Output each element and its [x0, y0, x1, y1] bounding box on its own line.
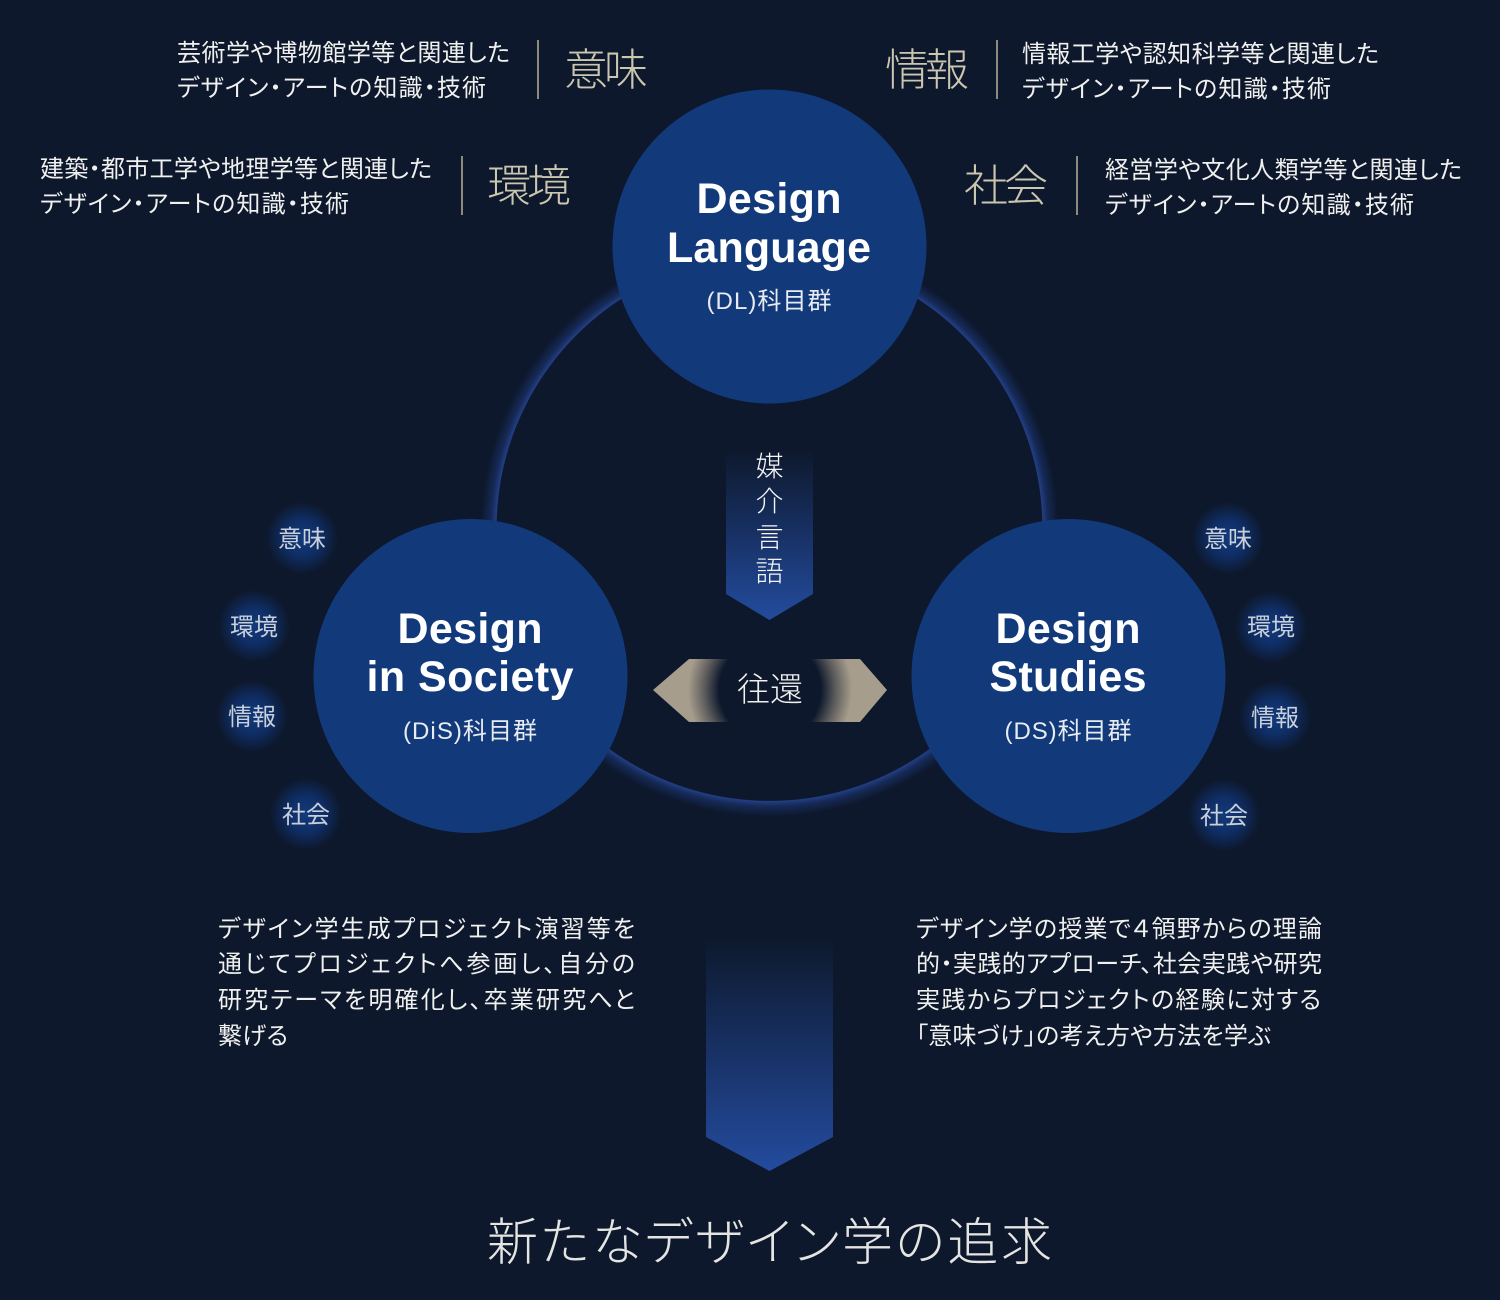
top-right block: 情報: 情報 — [885, 46, 969, 95]
circle: Design Studies — [912, 519, 1226, 833]
top-left block: 意味: デザイン・アートの知識・技術 — [177, 75, 486, 102]
top-left block: 環境: 環境 — [487, 162, 571, 211]
right satellite labels: 環境 — [1247, 614, 1295, 641]
top-right block: 社会: デザイン・アートの知識・技術 — [1105, 192, 1414, 219]
right satellite labels — [1188, 502, 1311, 851]
description: Design in Society: 通じてプロジェクトへ参画し、自分の — [218, 951, 635, 978]
circle: Design Language: Language — [667, 224, 871, 272]
description: Design in Society: デザイン学生成プロジェクト演習等を — [218, 916, 635, 943]
description: Design Studies: 「意味づけ」の考え方や方法を学ぶ — [916, 1023, 1271, 1050]
arrow: 媒介言語 — [726, 450, 813, 620]
description: Design Studies: デザイン学の授業で４領野からの理論 — [916, 916, 1322, 943]
top-left block: 環境 — [40, 156, 571, 218]
arrow: 媒介言語: 介 — [755, 486, 784, 517]
circle: Design Studies: Studies — [990, 653, 1146, 701]
description: Design in Society: 繋げる — [218, 1023, 288, 1050]
top-right block: 社会 — [964, 156, 1462, 219]
conclusion heading: 新たなデザイン学の追求 — [487, 1214, 1052, 1271]
left satellite labels: 社会 — [282, 802, 330, 829]
top-left block: 意味 — [177, 40, 648, 102]
left satellite labels: 意味 — [278, 526, 326, 553]
circle: Design in Society — [314, 519, 628, 833]
left satellite labels — [216, 502, 342, 850]
circle: Design Studies: Design — [996, 605, 1140, 653]
circle: Design in Society: in Society — [366, 653, 574, 701]
description: Design Studies: 的・実践的アプローチ、社会実践や研究 — [916, 951, 1322, 978]
top-left block: 環境: 建築・都市工学や地理学等と関連した — [40, 156, 432, 183]
top-right block: 情報 — [885, 40, 1379, 103]
top-right block: 情報: デザイン・アートの知識・技術 — [1022, 76, 1331, 103]
connecting ring — [480, 238, 1060, 818]
left satellite labels: 環境 — [230, 614, 278, 641]
double arrow: 往還: 往還 — [737, 671, 803, 708]
top-left block: 意味: 芸術学や博物館学等と関連した — [177, 40, 510, 67]
right satellite labels: 意味 — [1204, 526, 1252, 553]
arrow: 媒介言語: 語 — [755, 556, 784, 587]
description: Design Studies: 実践からプロジェクトの経験に対する — [916, 987, 1321, 1014]
arrow: 媒介言語: 言 — [755, 522, 784, 553]
left satellite labels: 情報 — [228, 704, 276, 731]
circle: Design Language: (DL)科目群 — [706, 288, 832, 315]
top-right block: 情報: 情報工学や認知科学等と関連した — [1022, 41, 1379, 68]
description: Design in Society: 研究テーマを明確化し、卒業研究へと — [218, 987, 635, 1014]
description: Design in Society — [218, 916, 635, 1050]
circle: Design Language — [612, 90, 926, 404]
double arrow: 往還 — [653, 659, 887, 722]
top-left block: 環境: デザイン・アートの知識・技術 — [40, 191, 349, 218]
description: Design Studies — [916, 916, 1322, 1050]
circle: Design in Society: (DiS)科目群 — [403, 718, 537, 745]
right satellite labels: 情報 — [1251, 705, 1299, 732]
circle: Design Language: Design — [696, 175, 842, 223]
large down arrow — [706, 936, 833, 1171]
circle: Design in Society: Design — [398, 605, 542, 653]
right satellite labels: 社会 — [1200, 803, 1248, 830]
top-right block: 社会: 経営学や文化人類学等と関連した — [1105, 157, 1462, 184]
top-left block: 意味: 意味 — [564, 46, 648, 95]
top-right block: 社会: 社会 — [964, 162, 1048, 211]
arrow: 媒介言語: 媒 — [755, 451, 784, 482]
circle: Design Studies: (DS)科目群 — [1004, 718, 1132, 745]
